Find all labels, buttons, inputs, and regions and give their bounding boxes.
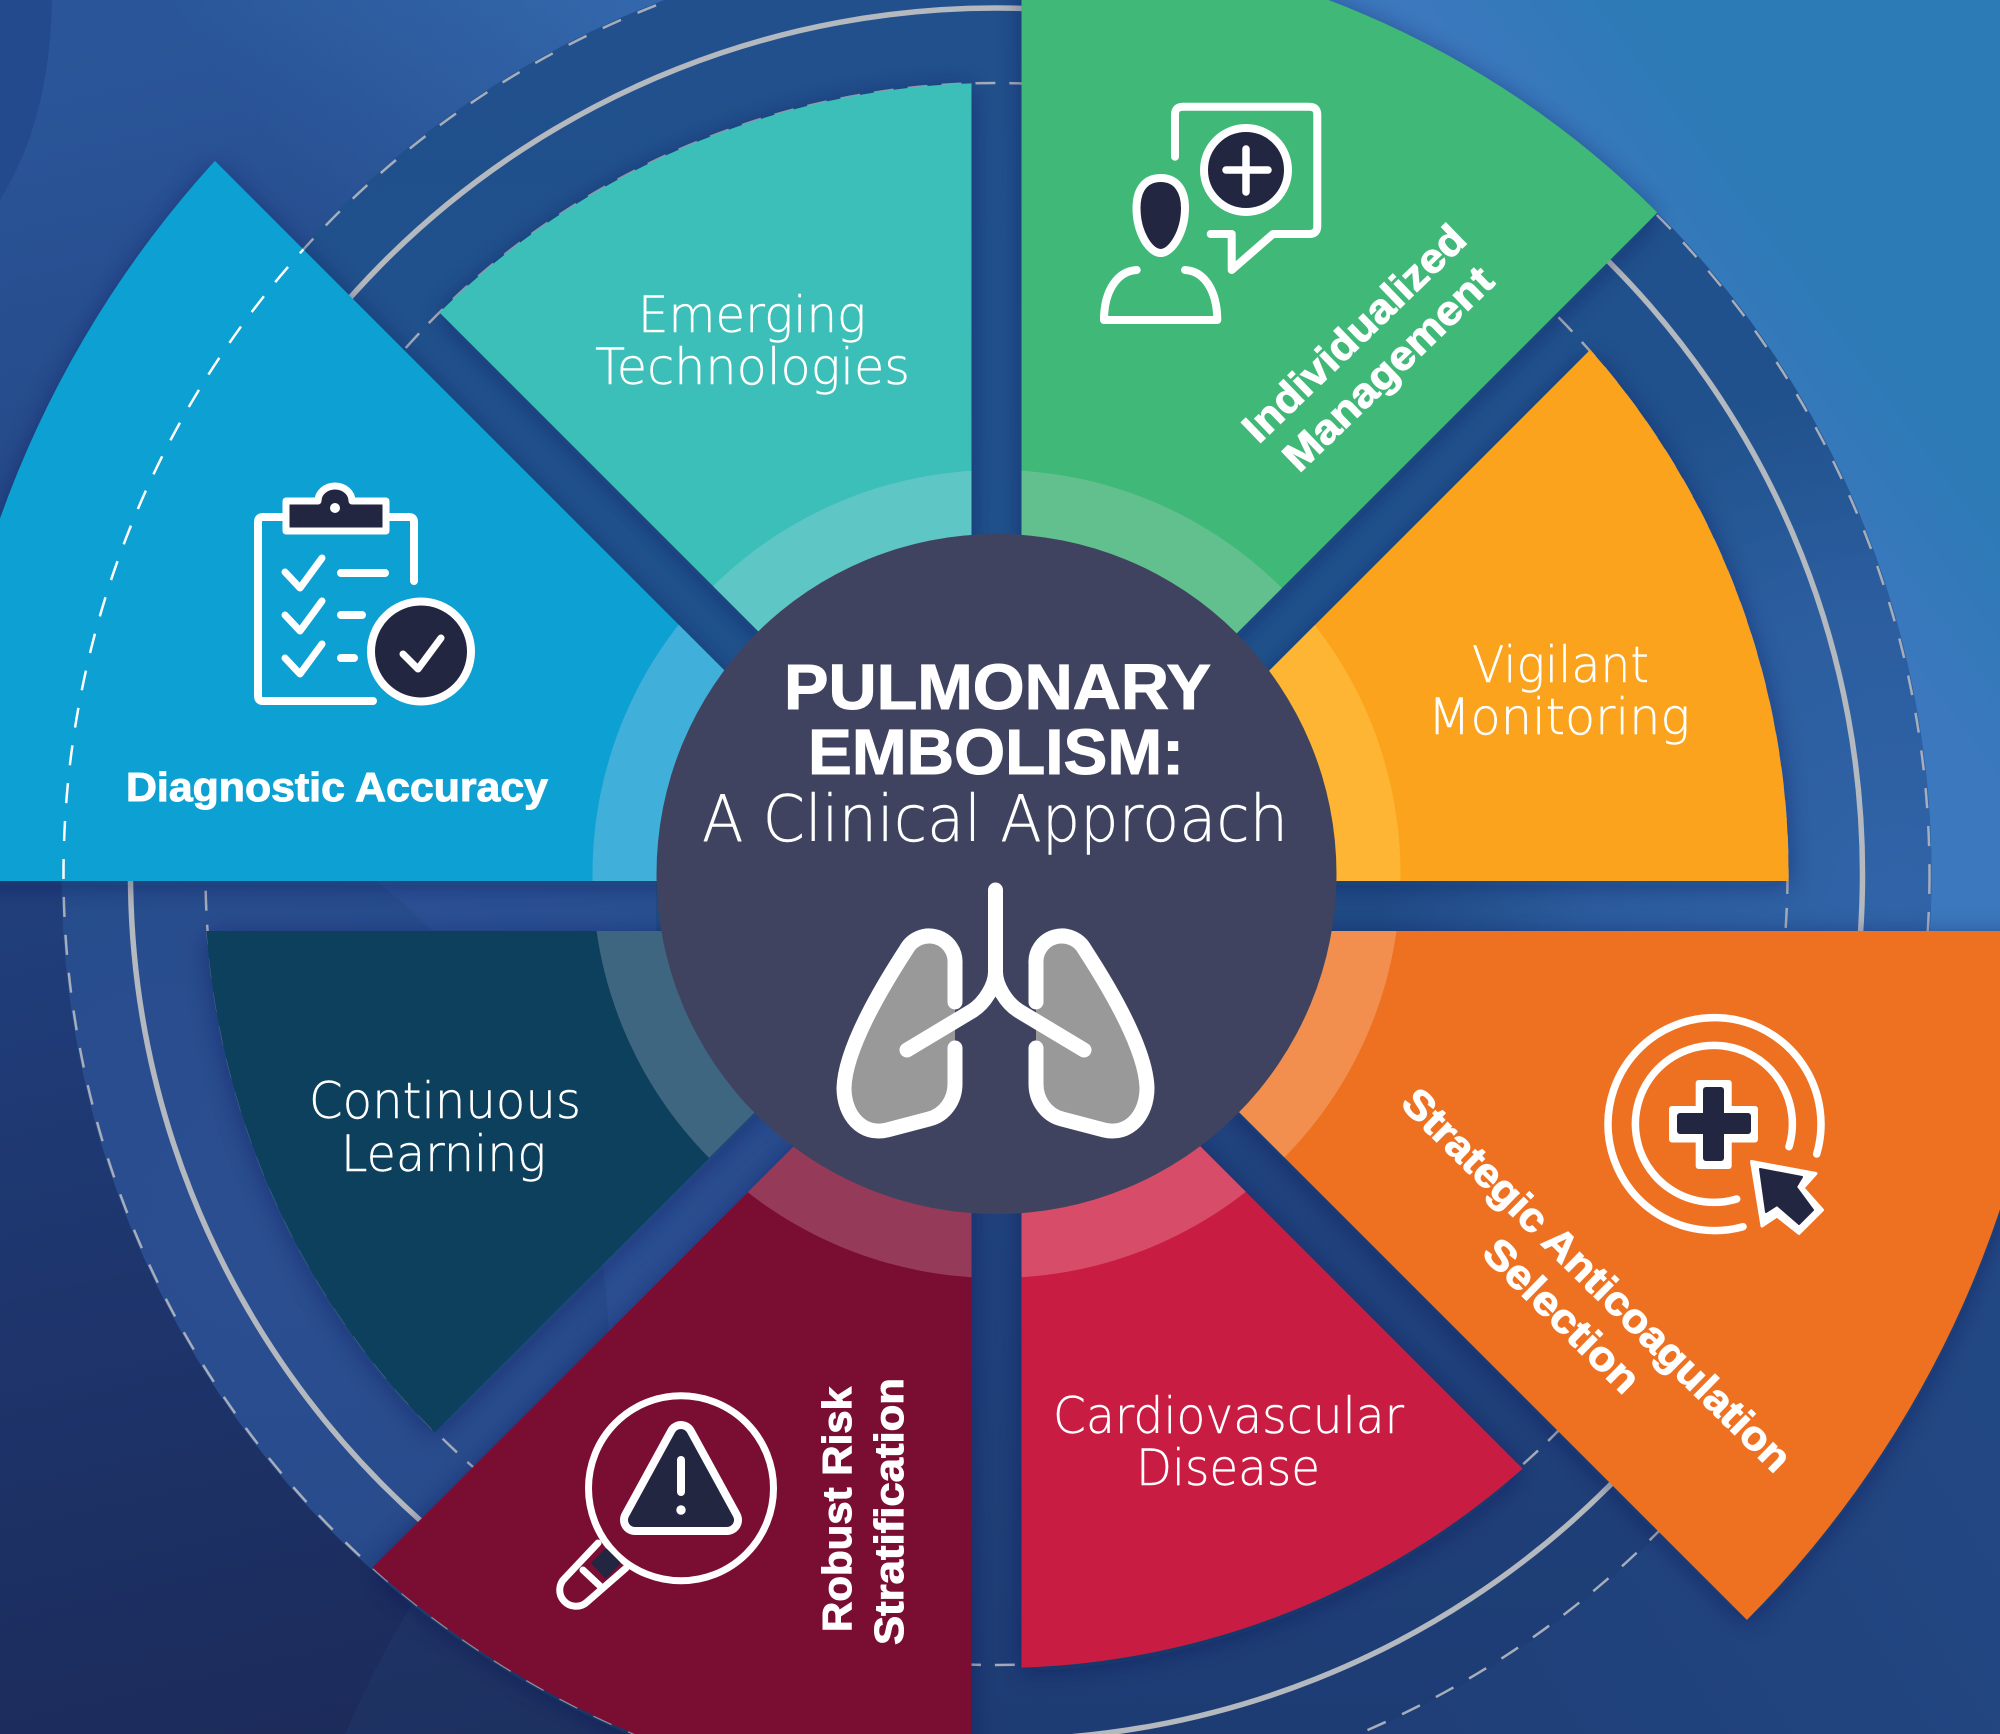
title: EMBOLISM: bbox=[808, 716, 1184, 788]
label: Robust Risk Stratification bbox=[814, 1378, 912, 1645]
label: Cardiovascular Disease: Cardiovascular bbox=[1053, 1387, 1404, 1445]
panel: Vigilant Monitoring bbox=[1266, 348, 1798, 895]
label: Vigilant Monitoring: Monitoring bbox=[1428, 688, 1690, 746]
icon: clinician with medical speech bubble bbox=[1104, 107, 1317, 320]
label: Continuous Learning: Learning bbox=[341, 1125, 546, 1183]
label: Strategic Anticoagulation Selection: Selection bbox=[1474, 1229, 1650, 1402]
label: Cardiovascular Disease: Disease bbox=[1136, 1439, 1320, 1497]
label: Strategic Anticoagulation Selection: Strategic Anticoagulation bbox=[1393, 1079, 1801, 1481]
label: Continuous Learning: Continuous bbox=[309, 1072, 581, 1130]
dashed inner ring bbox=[206, 83, 1788, 1665]
icon: medical cross target with cursor bbox=[1608, 1018, 1822, 1234]
label: Emerging Technologies: Technologies bbox=[595, 338, 910, 396]
panel: Diagnostic Accuracy bbox=[0, 161, 727, 900]
label: Robust Risk Stratification: Robust Risk bbox=[814, 1387, 860, 1632]
title: A Clinical Approach bbox=[702, 783, 1288, 857]
label: Diagnostic Accuracy: Diagnostic Accuracy bbox=[126, 764, 548, 810]
panel: Cardiovascular Disease bbox=[1010, 1145, 1527, 1674]
label: Individualized Management: Individualized bbox=[1233, 215, 1475, 451]
panel: Robust Risk Stratification bbox=[372, 1144, 981, 1734]
panel: Emerging Technologies bbox=[433, 81, 980, 638]
label: Vigilant Monitoring: Vigilant bbox=[1472, 636, 1649, 694]
dashed ring over panel bbox=[62, 248, 304, 879]
icon: clipboard checklist bbox=[258, 486, 471, 702]
label: Individualized Management bbox=[1233, 215, 1509, 487]
label: Individualized Management: Management bbox=[1273, 257, 1503, 480]
label: Emerging Technologies: Emerging bbox=[638, 286, 866, 344]
panel: Individualized Management bbox=[1006, 0, 1664, 640]
icon: lungs bbox=[844, 890, 1147, 1131]
panel: Continuous Learning bbox=[202, 926, 761, 1441]
title: PULMONARY bbox=[784, 651, 1211, 723]
icon: magnifier with warning triangle bbox=[560, 1396, 774, 1606]
label: Robust Risk Stratification: Stratification bbox=[866, 1378, 912, 1645]
title bbox=[702, 651, 1288, 857]
center circle bbox=[656, 534, 1336, 1214]
panel: Strategic Anticoagulation Selection bbox=[1234, 920, 2000, 1620]
